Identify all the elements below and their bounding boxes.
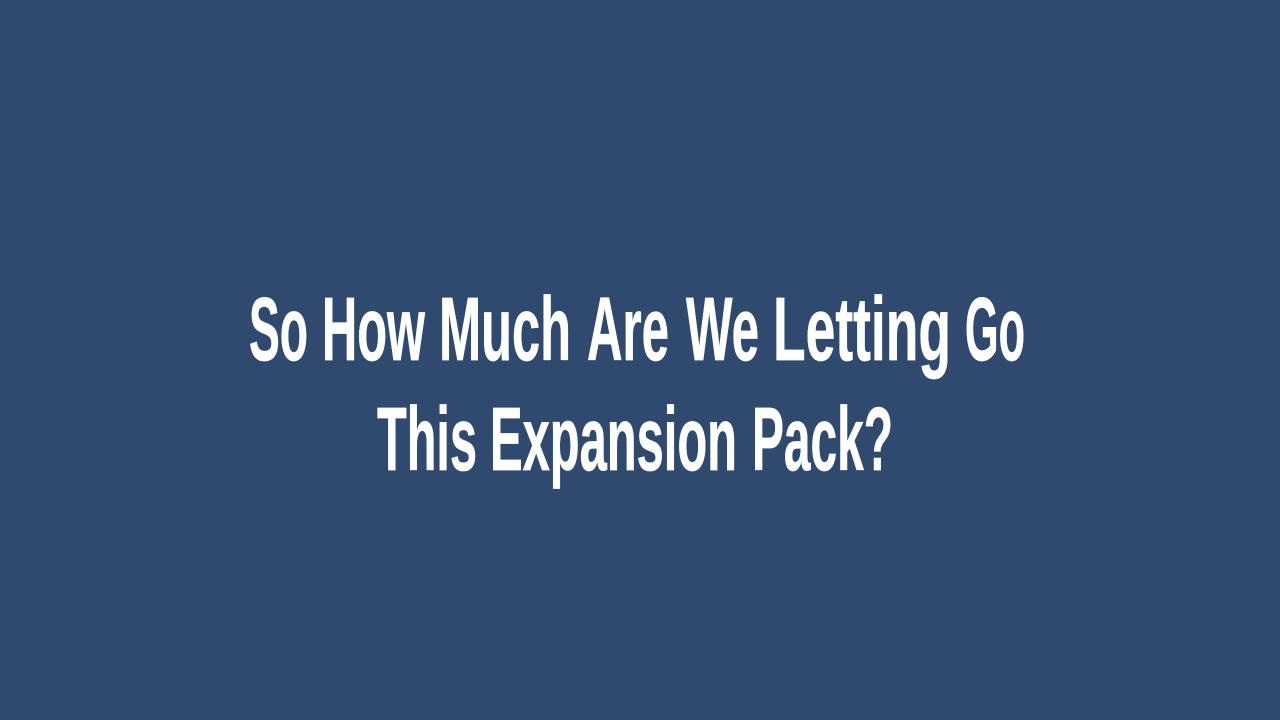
title line 1: Are	[587, 280, 669, 380]
title line 1: Letting	[773, 280, 951, 380]
title line 1	[249, 280, 1025, 380]
title	[249, 280, 1025, 490]
title line 2: Expansion	[490, 390, 737, 490]
title line 1: We	[686, 280, 759, 380]
title line 1: So	[249, 280, 308, 380]
title line 1: Much	[439, 280, 571, 380]
title line 2: This	[377, 390, 477, 490]
title line 2: Pack?	[752, 390, 893, 490]
title line 1: How	[322, 280, 426, 380]
text: Go	[965, 280, 1025, 380]
